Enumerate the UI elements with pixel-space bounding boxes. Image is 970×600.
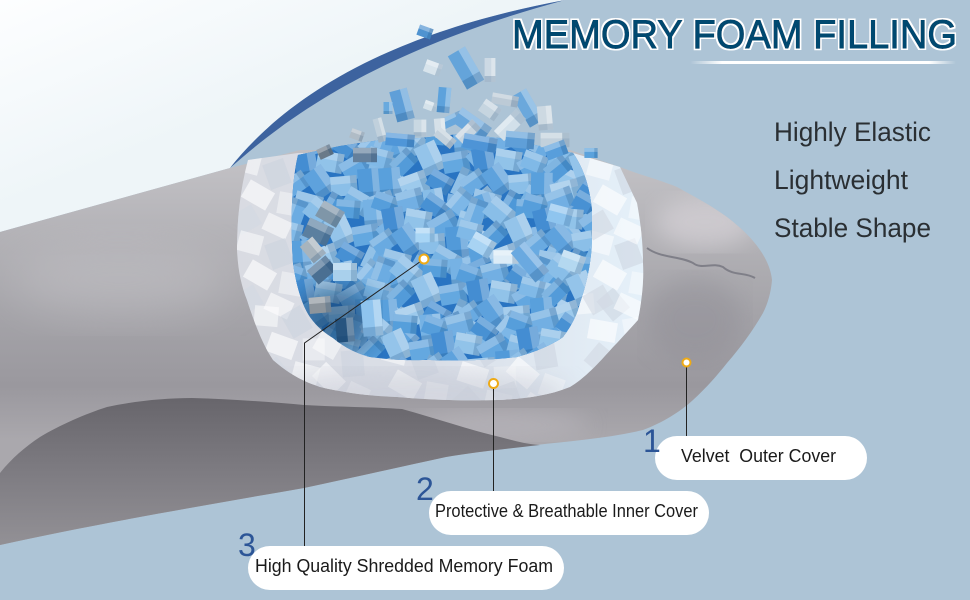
callout 2: inner cover [416, 471, 709, 535]
pillow seam [647, 248, 755, 278]
callout 1: velvet outer cover [643, 423, 867, 480]
marker dot 1 [682, 358, 690, 366]
callout 3: shredded foam [238, 527, 564, 590]
blue curved band [230, 0, 565, 168]
deepening tint over the core [285, 130, 600, 365]
callout 2: inner cover: 2 [416, 471, 434, 507]
pillow underside velvet [0, 398, 540, 545]
marker dot 2 [489, 379, 498, 388]
feature list: Highly Elastic [774, 117, 931, 147]
pillow right-end highlight and shading [10, 196, 755, 439]
feature list: Lightweight [774, 165, 908, 195]
grey and highlight cubes in the core [300, 200, 586, 343]
inner cover cutaway with white foam [237, 153, 644, 400]
white curved corner area [0, 0, 565, 232]
title underline [690, 61, 956, 64]
marker dot 3 [420, 254, 428, 264]
feature list [774, 117, 931, 243]
pillow main velvet body [0, 150, 772, 545]
callout 2: inner cover: Protective & Breathable Inner Cover [435, 501, 698, 521]
title: memory foam filling: MEMORY FOAM FILLING [512, 13, 957, 57]
grey tint along the bottom of the inner cover [297, 367, 563, 400]
callout 3: shredded foam: 3 [238, 527, 256, 563]
callout 1: velvet outer cover: Velvet Outer Cover [681, 446, 836, 466]
shredded memory foam core [292, 134, 592, 360]
feature list: Stable Shape [774, 213, 931, 243]
leader line 2 [492, 383, 494, 491]
callout 1: velvet outer cover: 1 [643, 423, 661, 459]
leader line 1 [686, 362, 688, 436]
flying foam cubes [316, 24, 598, 162]
dark shaded lower-left of core [295, 286, 375, 354]
leader line 3 [304, 259, 424, 546]
callout 3: shredded foam: High Quality Shredded Memory Foam [255, 556, 553, 576]
